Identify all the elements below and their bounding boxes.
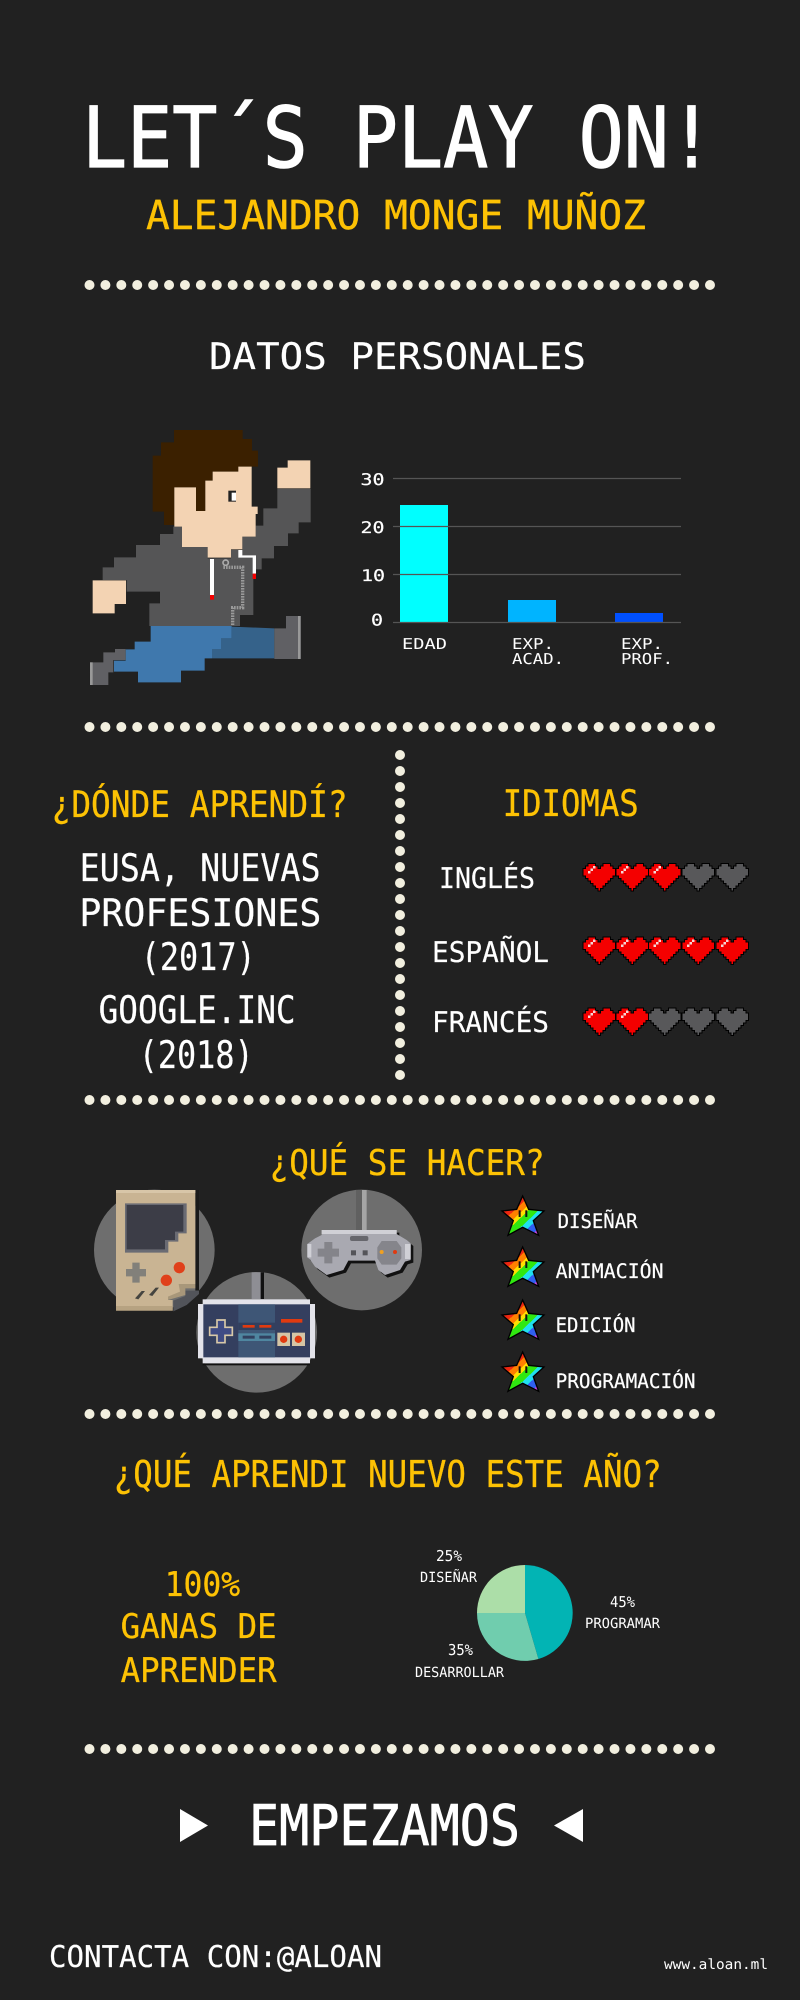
list: skills	[502, 1196, 696, 1393]
language: ingles	[439, 861, 748, 895]
bar chart: 30	[360, 470, 384, 489]
icon: pixel character running	[90, 430, 311, 685]
subtitle: name: ALEJANDRO MONGE MUÑOZ	[146, 192, 646, 239]
heading: que se hacer: ¿QUÉ SE HACER?	[270, 1142, 545, 1184]
pie chart: DISEÑAR	[420, 1569, 478, 1586]
bar chart: EXP.	[621, 635, 663, 653]
arrow: left	[554, 1809, 583, 1842]
text block: studies: PROFESIONES	[79, 891, 321, 935]
icon: nes pad	[198, 1272, 315, 1365]
language: espanol: ESPAÑOL	[432, 935, 549, 969]
skill: animacion: ANIMACIÓN	[556, 1259, 664, 1283]
bar chart: EXP.	[512, 635, 554, 653]
heading: que aprendi nuevo: ¿QUÉ APRENDI NUEVO ESTE AÑO?	[114, 1452, 662, 1496]
contact: CONTACTA CON:@ALOAN	[49, 1940, 382, 1975]
callout: ganas de aprender: 100%	[165, 1565, 240, 1605]
bar chart: 20	[360, 518, 384, 537]
panel: donde aprendi	[52, 783, 348, 1077]
text block: studies: GOOGLE.INC	[99, 988, 296, 1032]
language: espanol	[432, 935, 748, 969]
skill: disenar	[502, 1196, 639, 1235]
skill: programacion	[502, 1352, 696, 1393]
website: www.aloan.ml	[664, 1957, 768, 1973]
pie chart: 35%	[448, 1641, 473, 1659]
language: frances: FRANCÉS	[432, 1005, 549, 1039]
heading: IDIOMAS	[503, 782, 639, 825]
text block: studies	[79, 846, 321, 1077]
language: ingles: INGLÉS	[439, 861, 535, 895]
skill: disenar: DISEÑAR	[558, 1209, 639, 1233]
bar chart: 0	[371, 610, 383, 630]
bar chart: PROF.	[621, 650, 673, 668]
skill: edicion: EDICIÓN	[556, 1313, 636, 1337]
pie chart: 45%	[610, 1593, 635, 1611]
text block: studies: EUSA, NUEVAS	[80, 846, 321, 890]
text block: studies: (2018)	[139, 1033, 254, 1077]
icon: snes pad	[307, 1190, 413, 1278]
callout: ganas de aprender: GANAS DE	[121, 1607, 277, 1647]
skill: programacion: PROGRAMACIÓN	[556, 1369, 696, 1393]
bar chart: EDAD	[402, 635, 447, 653]
bar chart: 10	[361, 566, 385, 585]
arrow: right	[180, 1809, 208, 1842]
heading: datos personales: DATOS PERSONALES	[209, 335, 586, 378]
callout: ganas de aprender: APRENDER	[121, 1651, 277, 1691]
panel: idiomas	[432, 782, 748, 1039]
title: LET´S PLAY ON!	[82, 89, 714, 187]
callout: ganas de aprender	[121, 1565, 277, 1691]
heading: ¿DÓNDE APRENDÍ?	[52, 783, 348, 826]
call to action: empezamos: EMPEZAMOS	[249, 1794, 520, 1859]
skill: animacion	[502, 1247, 664, 1286]
pie chart: DESARROLLAR	[415, 1665, 505, 1681]
text block: studies: (2017)	[141, 935, 256, 979]
icons: game consoles	[94, 1190, 422, 1393]
skill: edicion	[502, 1300, 636, 1339]
pie chart: PROGRAMAR	[585, 1616, 661, 1632]
language: frances	[432, 1005, 748, 1039]
pie chart	[415, 1547, 661, 1681]
icon: game boy	[116, 1190, 199, 1311]
bar chart: ACAD.	[512, 650, 564, 668]
bar chart	[360, 470, 681, 668]
pie chart: 25%	[436, 1547, 462, 1565]
